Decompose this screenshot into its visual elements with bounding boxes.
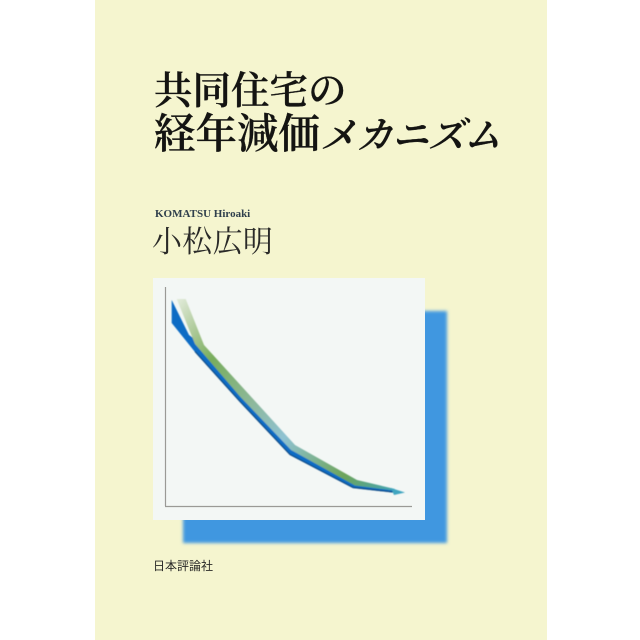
- title line 2: 経年減価: [154, 111, 320, 157]
- declining curve: [172, 299, 405, 495]
- title line 2: [154, 111, 500, 157]
- chart axes: [165, 287, 412, 506]
- title line 1: 共同住宅の: [154, 71, 347, 113]
- dark lower edge: [195, 352, 393, 492]
- title: [154, 70, 500, 157]
- book cover panel: [95, 0, 547, 640]
- author name japanese: 小松広明: [152, 226, 273, 259]
- blue shadow panel: [183, 311, 447, 543]
- green gradient band: [177, 299, 395, 490]
- arrow head: [391, 488, 405, 495]
- title line 2: メカニズム: [320, 116, 500, 157]
- blue band: [172, 300, 393, 492]
- white chart panel: [153, 278, 425, 520]
- author name latin: KOMATSU Hiroaki: [155, 208, 250, 220]
- publisher: 日本評論社: [153, 559, 213, 573]
